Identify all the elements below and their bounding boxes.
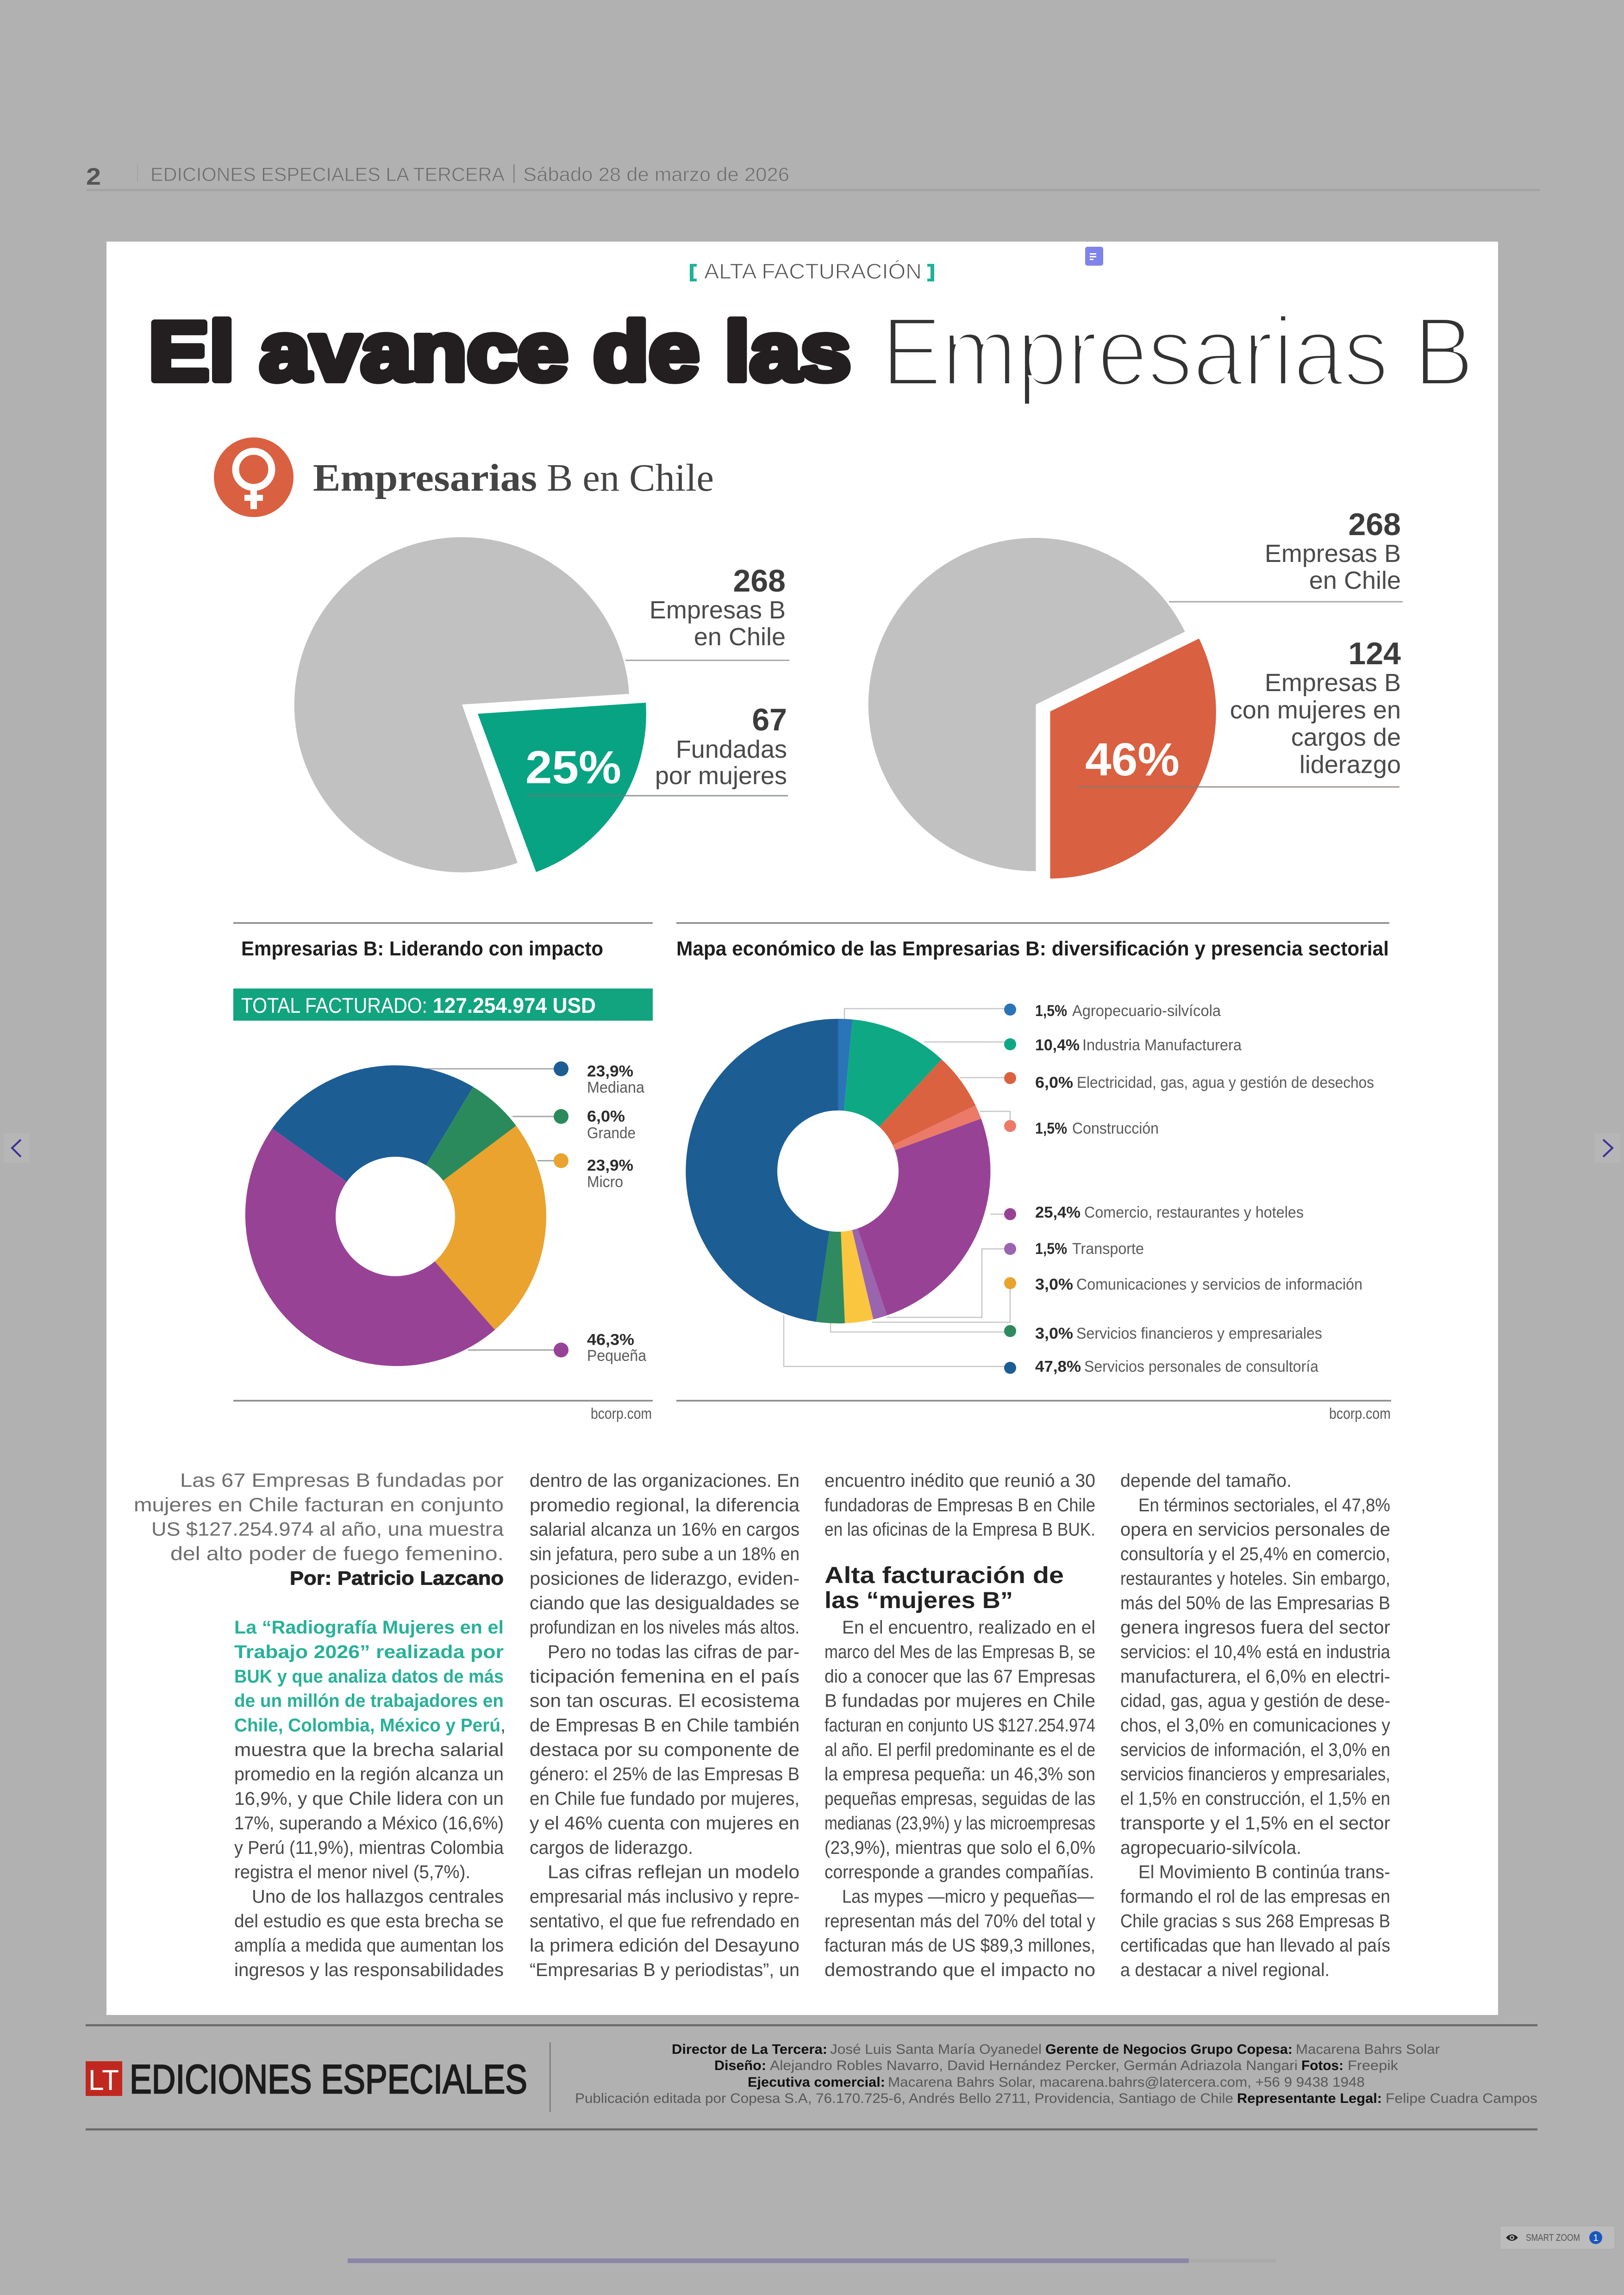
article column 2: la primera edición del Desayuno — [530, 1935, 800, 1956]
labels for left pie: por mujeres — [655, 762, 787, 790]
article column 2: Pero no todas las cifras de par- — [548, 1642, 800, 1662]
legend: 6,0% — [1035, 1074, 1073, 1091]
article column 4: más del 50% de las Empresarias B — [1120, 1593, 1390, 1613]
labels for right pie — [1077, 507, 1403, 787]
article column 1: promedio en la región alcanza un — [234, 1764, 504, 1784]
legend: 1,5% — [1035, 1240, 1067, 1258]
article column 3: facturan más de US $89,3 millones, — [824, 1935, 1095, 1956]
labels for left pie — [527, 563, 789, 796]
labels for left pie: Fundadas — [676, 736, 787, 763]
article column 3: B fundadas por mujeres en Chile — [824, 1691, 1095, 1711]
credits: Alejandro Robles Navarro, David Hernández Percker, Germán Adriazola Nangari — [770, 2058, 1298, 2073]
article column 4: Chile gracias s sus 268 Empresas B — [1120, 1911, 1390, 1931]
legend: Transporte — [1072, 1240, 1144, 1258]
article column 4: cidad, gas, agua y gestión de dese- — [1120, 1691, 1390, 1711]
article column 1: amplía a medida que aumentan los — [234, 1935, 504, 1956]
article column 3: en las oficinas de la Empresa B BUK. — [824, 1520, 1095, 1540]
article column 3: la empresa pequeña: un 46,3% son — [824, 1764, 1095, 1784]
article column 3: pequeñas empresas, seguidas de las — [824, 1789, 1095, 1809]
article column 4: el 1,5% en construcción, el 1,5% en — [1120, 1789, 1390, 1809]
legend: Industria Manufacturera — [1082, 1036, 1242, 1054]
subheading: Alta facturación de — [824, 1562, 1064, 1588]
article column 2: de Empresas B en Chile también — [530, 1715, 800, 1736]
legend: Servicios financieros y empresariales — [1076, 1325, 1322, 1342]
credits: Gerente de Negocios Grupo Copesa: — [1045, 2042, 1293, 2057]
article column 2: promedio regional, la diferencia — [530, 1495, 800, 1515]
legend: Grande — [587, 1124, 636, 1142]
article column 4: certificadas que han llevado al país — [1120, 1935, 1390, 1956]
article column 2: dentro de las organizaciones. En — [530, 1471, 800, 1491]
credits: Felipe Cuadra Campos — [1386, 2091, 1537, 2106]
article column 2: Las cifras reflejan un modelo — [548, 1862, 800, 1883]
labels for right pie: Empresas B — [1265, 669, 1401, 697]
legend: Pequeña — [587, 1347, 646, 1365]
article column 4: servicios de información, el 3,0% en — [1120, 1740, 1390, 1760]
credits: Director de La Tercera: — [672, 2042, 827, 2057]
article column 1: Chile, Colombia, México y Perú — [234, 1715, 500, 1736]
credits: Macarena Bahrs Solar — [1296, 2042, 1440, 2057]
legend: 3,0% — [1035, 1325, 1073, 1342]
article column 4: genera ingresos fuera del sector — [1120, 1617, 1390, 1638]
white article panel — [106, 242, 1498, 2015]
article column 1: Trabajo 2026” realizada por — [234, 1642, 504, 1662]
intro text — [134, 1469, 504, 1589]
article column 2: empresarial más inclusivo y repre- — [530, 1887, 800, 1907]
article column 4: formando el rol de las empresas en — [1120, 1887, 1390, 1907]
legend: 1,5% — [1035, 1002, 1067, 1020]
pie chart: 25% founded by women — [294, 537, 646, 873]
subheading: las “mujeres B” — [824, 1587, 1013, 1613]
legend: Micro — [587, 1173, 623, 1191]
byline: Por: Patricio Lazcano — [290, 1567, 504, 1589]
article column 3: facturan en conjunto US $127.254.974 — [824, 1715, 1095, 1736]
logo: LT Ediciones Especiales: EDICIONES ESPECIALES — [130, 2056, 527, 2102]
article column 4: consultoría y el 25,4% en comercio, — [1120, 1544, 1390, 1565]
labels for left pie: 268 — [733, 563, 786, 599]
credits: Fotos: — [1301, 2058, 1343, 2073]
legend: Agropecuario-silvícola — [1072, 1002, 1221, 1020]
article column 4: manufacturera, el 6,0% en electri- — [1120, 1666, 1390, 1687]
labels for right pie: liderazgo — [1299, 751, 1401, 779]
labels for right pie: cargos de — [1291, 723, 1401, 751]
article column 3: corresponde a grandes compañías. — [824, 1862, 1094, 1883]
donut chart: sectors — [686, 1019, 990, 1323]
article column 2: sentativo, el que fue refrendado en — [530, 1911, 800, 1931]
article column 1: registra el menor nivel (5,7%). — [234, 1862, 470, 1883]
section tag: alta facturación: ALTA FACTURACIÓN — [704, 259, 922, 283]
legend: 1,5% — [1035, 1120, 1067, 1137]
main title: El avance de las — [149, 305, 851, 398]
page header strip — [86, 163, 1540, 191]
article column 1: 17%, superando a México (16,6%) — [234, 1813, 504, 1834]
credits: José Luis Santa María Oyanedel — [830, 2042, 1042, 2057]
article column 4: servicios financieros y empresariales, — [1120, 1764, 1390, 1784]
article column 4: opera en servicios personales de — [1120, 1520, 1390, 1540]
legend: Electricidad, gas, agua y gestión de desechos — [1077, 1074, 1374, 1091]
labels for left pie: en Chile — [694, 623, 786, 651]
badge: count — [1589, 2231, 1602, 2244]
article column 1: 16,9%, y que Chile lidera con un — [234, 1789, 504, 1809]
article column 2: cargos de liderazgo. — [530, 1838, 693, 1858]
widget badge — [1085, 247, 1103, 266]
article column 4: El Movimiento B continúa trans- — [1138, 1862, 1390, 1883]
heading: Empresarias B en Chile: Empresarias — [313, 456, 537, 499]
article column 4: restaurantes y hoteles. Sin embargo, — [1120, 1568, 1390, 1589]
intro text: del alto poder de fuego femenino. — [170, 1542, 504, 1565]
legend: 46,3% — [587, 1331, 634, 1349]
credits: Diseño: — [714, 2058, 766, 2073]
labels for right pie: en Chile — [1309, 567, 1401, 594]
legend — [554, 1061, 646, 1365]
article column 3: En el encuentro, realizado en el — [842, 1617, 1095, 1638]
page number: 2 — [86, 163, 101, 190]
article column 3: al año. El perfil predominante es el de — [824, 1740, 1095, 1760]
heading: Empresarias B en Chile — [313, 456, 714, 499]
total bar — [233, 989, 653, 1021]
legend: 47,8% — [1035, 1358, 1081, 1376]
smart zoom button: SMART ZOOM — [1526, 2233, 1580, 2243]
article column 4: chos, el 3,0% en comunicaciones y — [1120, 1715, 1390, 1736]
donut chart: company size — [245, 1065, 546, 1366]
labels for left pie: 67 — [752, 702, 787, 737]
legend: Construcción — [1072, 1120, 1159, 1137]
article column 1: , — [500, 1715, 506, 1736]
logo: LT Ediciones Especiales: LT — [88, 2064, 119, 2096]
main title: Empresarias B — [881, 296, 1474, 406]
article column 3: representan más del 70% del total y — [824, 1911, 1095, 1931]
article column 2: profundizan en los niveles más altos. — [530, 1617, 800, 1638]
credits: Publicación editada por Copesa S.A, 76.170.725-6, Andrés Bello 2711, Providencia, Santiago de Chile — [575, 2091, 1233, 2106]
labels for right pie: 124 — [1349, 636, 1401, 671]
source: bcorp.com — [591, 1405, 652, 1422]
total bar: TOTAL FACTURADO: — [241, 993, 427, 1017]
main title — [149, 296, 1474, 406]
article column 4 — [1120, 1471, 1391, 1980]
article column 3: encuentro inédito que reunió a 30 — [824, 1471, 1095, 1491]
icon: eye — [1506, 2234, 1518, 2241]
legend — [1004, 1002, 1374, 1376]
article column 2: y el 46% cuenta con mujeres en — [530, 1813, 800, 1834]
article column 2: son tan oscuras. El ecosistema — [530, 1691, 800, 1711]
legend: 10,4% — [1035, 1036, 1080, 1054]
article column 4: agropecuario-silvícola. — [1120, 1838, 1301, 1858]
panel: revenue by company size — [233, 923, 653, 1422]
article column 1: muestra que la brecha salarial — [234, 1740, 504, 1760]
article column 2: destaca por su componente de — [530, 1740, 800, 1760]
intro text: mujeres en Chile facturan en conjunto — [134, 1494, 504, 1515]
article column 1: del estudio es que esta brecha se — [234, 1911, 504, 1931]
source: bcorp.com — [1329, 1405, 1391, 1422]
article column 1: BUK y que analiza datos de más — [234, 1666, 504, 1687]
legend: 6,0% — [587, 1108, 625, 1125]
article column 2: salarial alcanza un 16% en cargos — [530, 1520, 800, 1540]
credits — [575, 2042, 1537, 2106]
legend: Mediana — [587, 1079, 644, 1096]
badge: count: 1 — [1593, 2233, 1599, 2243]
pie chart: 46% women in leadership — [868, 538, 1216, 879]
total bar: 127.254.974 USD — [433, 993, 596, 1017]
credits: Freepik — [1348, 2058, 1399, 2073]
labels for right pie: Empresas B — [1265, 540, 1401, 568]
arrow: previous page — [4, 1133, 30, 1163]
article column 1: ingresos y las responsabilidades — [234, 1960, 504, 1980]
labels for left pie: Empresas B — [650, 596, 786, 624]
article column 3: fundadoras de Empresas B en Chile — [824, 1495, 1095, 1515]
leader lines — [427, 1069, 561, 1350]
article column 4: En términos sectoriales, el 47,8% — [1138, 1495, 1390, 1515]
smart zoom button — [1500, 2226, 1615, 2249]
article column 3: (23,9%), mientras que solo el 6,0% — [824, 1838, 1095, 1858]
legend: Servicios personales de consultoría — [1084, 1358, 1318, 1376]
subheading — [824, 1562, 1064, 1613]
intro text: US $127.254.974 al año, una muestra — [151, 1518, 504, 1540]
article column 1: y Perú (11,9%), mientras Colombia — [234, 1838, 504, 1858]
credits: Ejecutiva comercial: — [748, 2075, 885, 2090]
credits: Representante Legal: — [1237, 2091, 1382, 2106]
heading: Empresarias B en Chile: B en Chile — [547, 456, 714, 499]
publication line: EDICIONES ESPECIALES LA TERCERA — [150, 163, 505, 185]
publication date: Sábado 28 de marzo de 2026 — [523, 163, 789, 185]
legend: Comunicaciones y servicios de información — [1076, 1276, 1362, 1293]
arrow: next page — [1594, 1133, 1620, 1163]
article column 1: La “Radiografía Mujeres en el — [234, 1617, 504, 1638]
article column 2: ciando que las desigualdades se — [530, 1593, 800, 1613]
article column 2: posiciones de liderazgo, eviden- — [530, 1568, 800, 1589]
article column 3: marco del Mes de las Empresas B, se — [824, 1642, 1095, 1662]
article column 2: ticipación femenina en el país — [530, 1666, 800, 1687]
article column 1 — [234, 1617, 506, 1980]
legend: 3,0% — [1035, 1276, 1073, 1293]
article column 3: dio a conocer que las 67 Empresas — [824, 1666, 1095, 1687]
intro text: Las 67 Empresas B fundadas por — [180, 1469, 504, 1491]
article column 3: Las mypes —micro y pequeñas— — [842, 1887, 1094, 1907]
legend: 25,4% — [1035, 1204, 1081, 1221]
footer — [86, 2024, 1537, 2130]
legend: 23,9% — [587, 1157, 633, 1174]
legend: 23,9% — [587, 1063, 633, 1080]
reading progress bar — [348, 2258, 1276, 2263]
article column 2: género: el 25% de las Empresas B — [530, 1764, 800, 1784]
article column 1: de un millón de trabajadores en — [234, 1691, 504, 1711]
article column 2 — [530, 1471, 800, 1980]
legend: Comercio, restaurantes y hoteles — [1084, 1204, 1304, 1221]
article column 2: sin jefatura, pero sube a un 18% en — [530, 1544, 800, 1565]
credits: Macarena Bahrs Solar, macarena.bahrs@latercera.com, +56 9 9438 1948 — [888, 2075, 1365, 2090]
icon: female symbol — [214, 437, 294, 517]
article column 4: a destacar a nivel regional. — [1120, 1960, 1330, 1980]
heading: Empresarias B: Liderando con impacto — [241, 937, 603, 960]
article column 4: servicios: el 10,4% está en industria — [1120, 1642, 1391, 1662]
article column 2: “Empresarias B y periodistas”, un — [530, 1960, 800, 1980]
article column 3: demostrando que el impacto no — [824, 1960, 1095, 1980]
value: 25%: 25% — [525, 742, 621, 793]
labels for right pie: con mujeres en — [1230, 696, 1401, 724]
article column 3 — [824, 1471, 1095, 1980]
value: 46%: 46% — [1085, 734, 1180, 786]
article column 1: Uno de los hallazgos centrales — [252, 1887, 504, 1907]
article column 3: medianas (23,9%) y las microempresas — [824, 1813, 1095, 1834]
labels for right pie: 268 — [1349, 507, 1401, 542]
article column 4: transporte y el 1,5% en el sector — [1120, 1813, 1390, 1834]
article column 4: depende del tamaño. — [1120, 1471, 1292, 1491]
leader lines — [784, 1009, 1010, 1366]
heading: Mapa económico de las Empresarias B: diversificación y presencia sectorial — [676, 937, 1389, 960]
panel: sectors — [676, 923, 1391, 1422]
article column 2: en Chile fue fundado por mujeres, — [530, 1789, 800, 1809]
